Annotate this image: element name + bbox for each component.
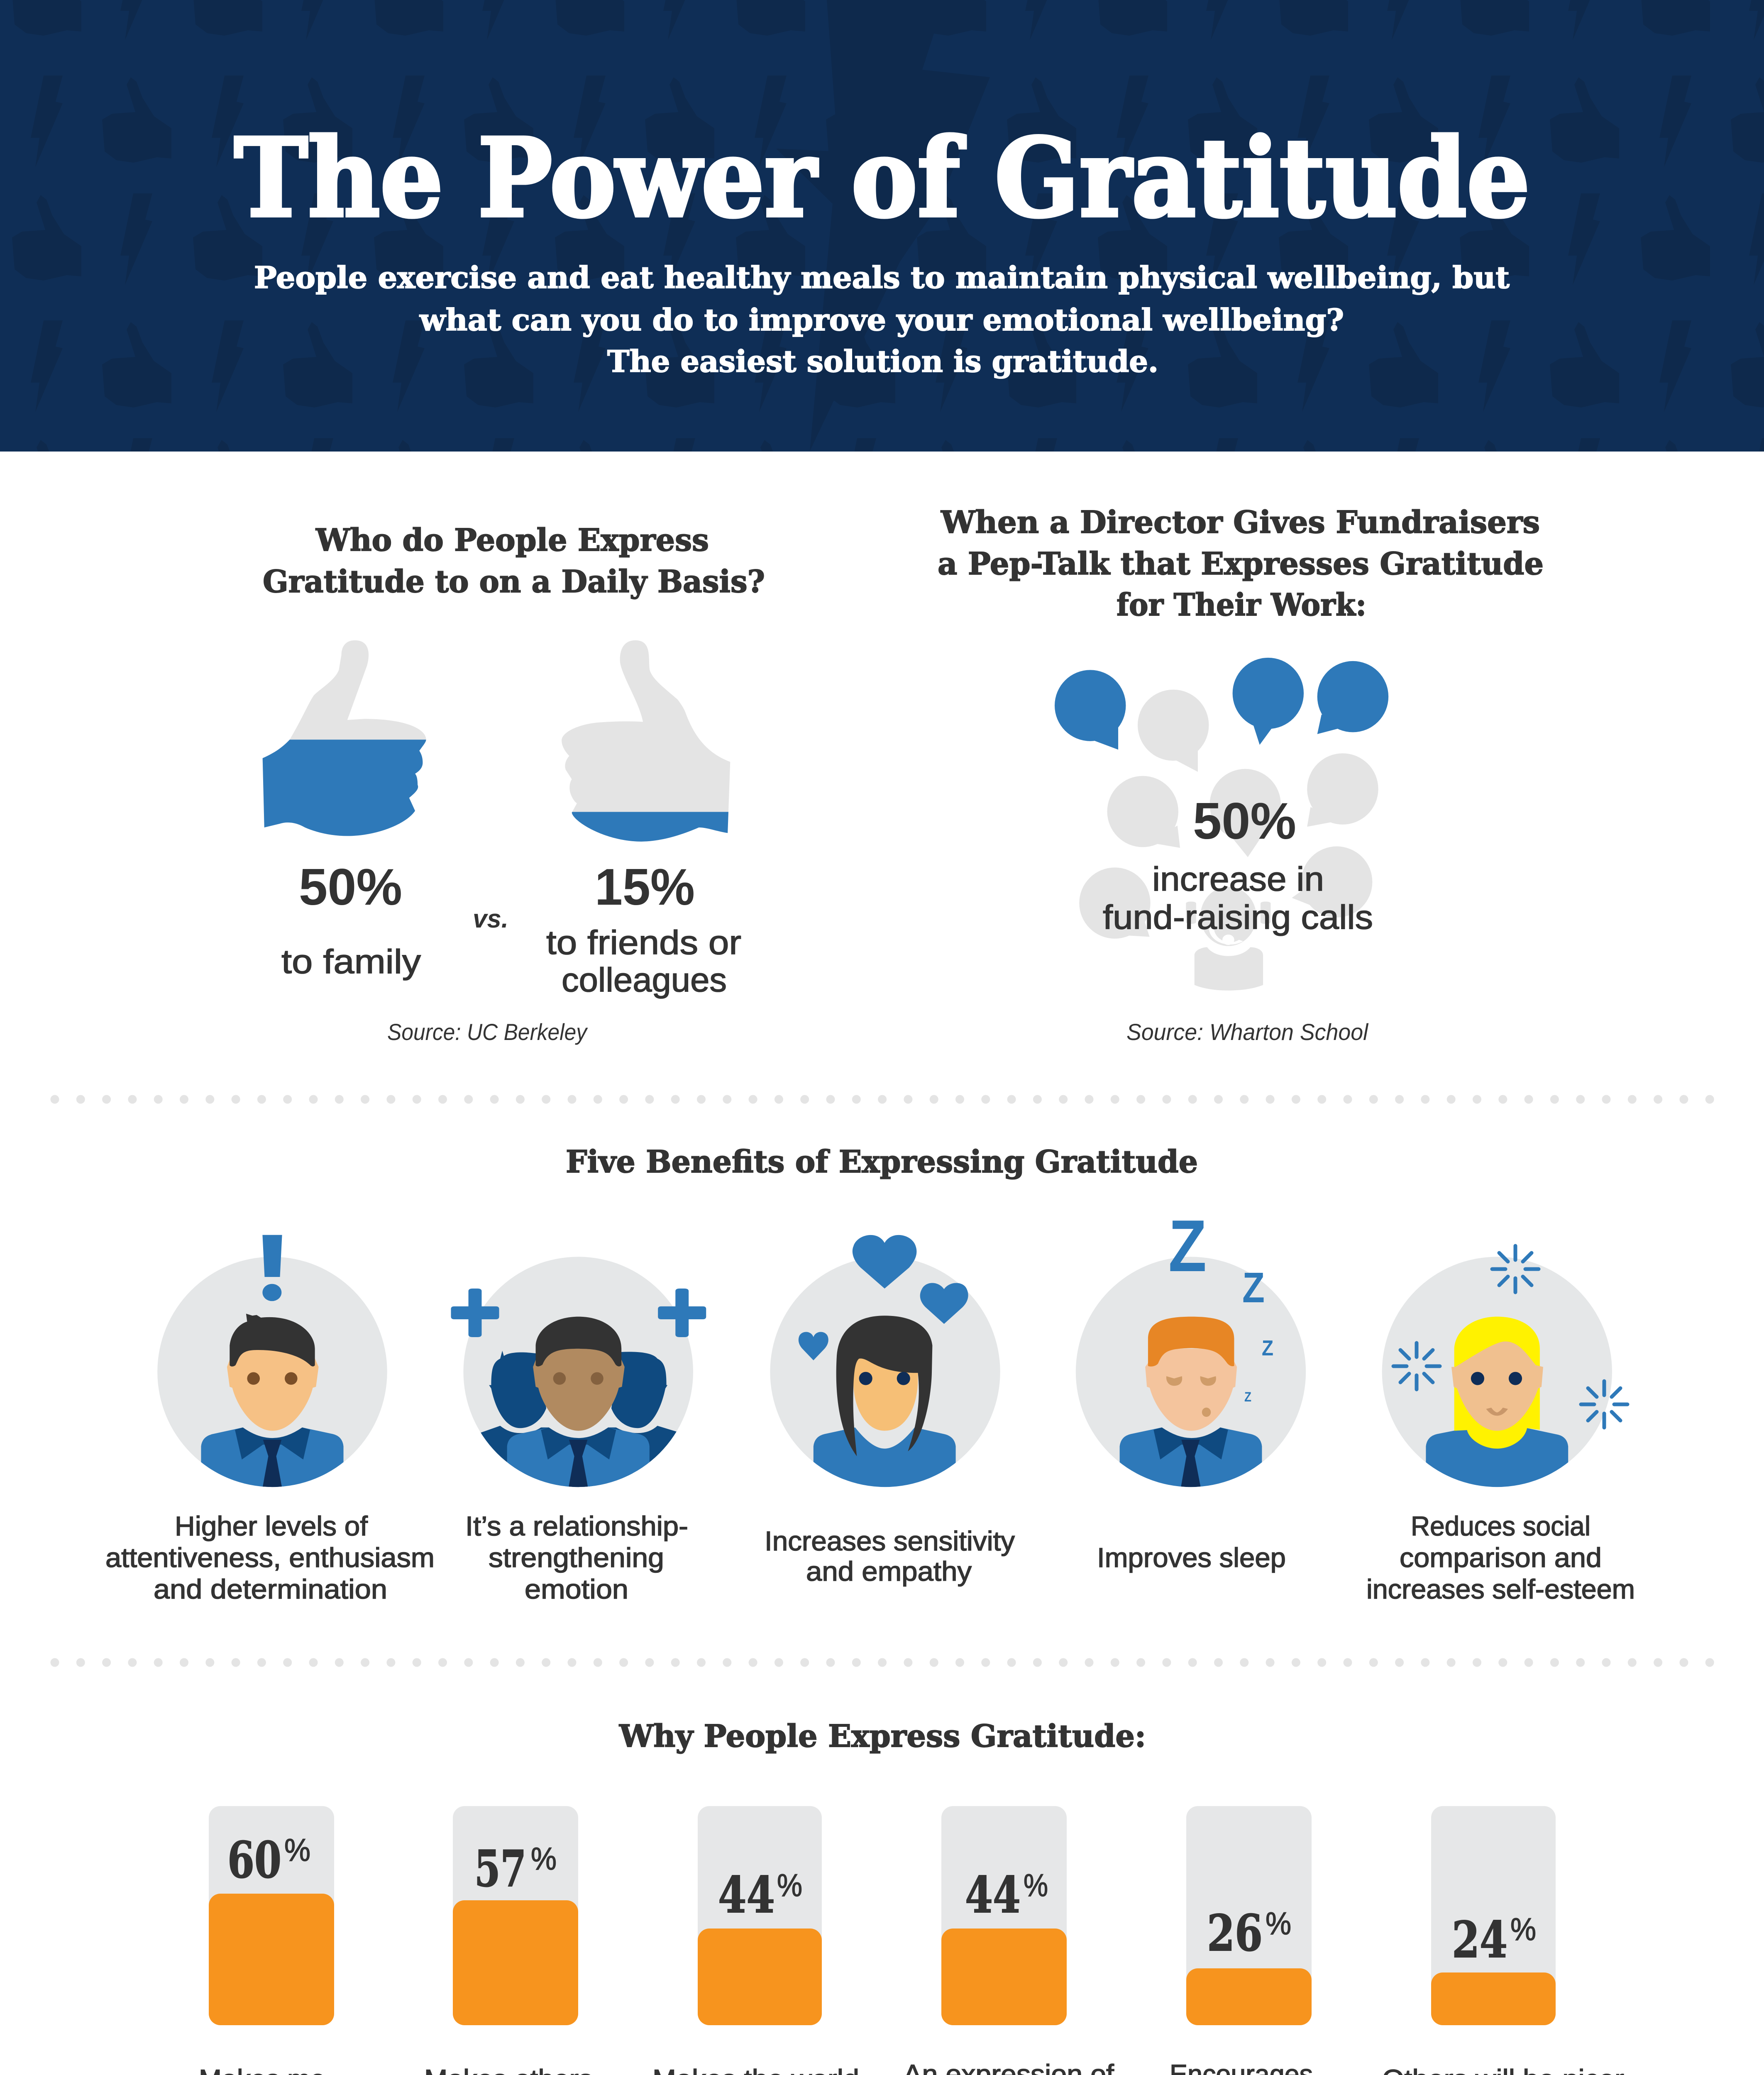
icon: thumbs up left 50 percent — [263, 640, 426, 836]
stat: 15 percent to friends or colleagues: colleagues — [562, 961, 727, 999]
stat: 15 percent to friends or colleagues: 15% — [595, 859, 695, 916]
source: Wharton School: Source: Wharton School — [1126, 1019, 1368, 1045]
icon: speech bubbles and headset person — [1055, 658, 1388, 991]
benefit 1 icon: attentive man — [157, 1235, 387, 1491]
header intro text: People exercise and eat healthy meals to maintain physical wellbeing, but — [254, 260, 1510, 295]
benefit 5 label: comparison and — [1400, 1542, 1602, 1573]
icon: thumbs up right 15 percent — [562, 640, 730, 842]
bar: 44 percent love: 44 — [965, 1866, 1021, 1924]
stat: 50 percent to family: 50% — [299, 859, 402, 916]
stat: 50 percent to family: to family — [281, 943, 421, 981]
bar: 44 percent love — [903, 1806, 1114, 2075]
benefit 5 label: Reduces social — [1411, 1511, 1591, 1541]
header intro text — [254, 260, 1510, 379]
vs label: vs. — [473, 905, 508, 933]
bar: 24 percent — [1382, 1806, 1624, 2075]
benefit 4 icon: sleeping man: Z — [1168, 1205, 1207, 1287]
benefit 2 label — [465, 1511, 688, 1604]
benefit 5 label — [1366, 1511, 1635, 1604]
bar: 26 percent: 26 — [1207, 1904, 1263, 1963]
benefit 2 label: It’s a relationship- — [465, 1511, 688, 1541]
bar: 24 percent: % — [1510, 1912, 1536, 1947]
heading: director pep-talk: a Pep-Talk that Expresses Gratitude — [938, 546, 1544, 582]
benefit 3 label: Increases sensitivity — [765, 1526, 1015, 1556]
benefit 2 icon: man with colleagues — [451, 1257, 706, 1491]
benefit 5 label: increases self-esteem — [1366, 1574, 1635, 1604]
heading: director pep-talk: for Their Work: — [1117, 587, 1366, 623]
benefit 1 label: attentiveness, enthusiasm — [105, 1542, 435, 1573]
stat: 50 percent increase in fund-raising calls: 50% — [1193, 793, 1296, 850]
benefit 1 label: Higher levels of — [175, 1511, 368, 1541]
heading: director pep-talk — [938, 505, 1544, 623]
header banner — [0, 0, 1764, 452]
bar: 60 percent: 60 — [227, 1831, 281, 1889]
stat: 15 percent to friends or colleagues — [546, 859, 741, 999]
stat: 50 percent to family — [281, 859, 421, 981]
bar: 24 percent: 24 — [1452, 1911, 1507, 1969]
stat: 50 percent increase in fund-raising calls: fund-raising calls — [1103, 898, 1373, 936]
bar: 57 percent — [424, 1806, 593, 2075]
bar: 60 percent — [199, 1806, 334, 2075]
benefit 2 label: strengthening — [489, 1542, 664, 1573]
stat: 50 percent increase in fund-raising calls — [1103, 793, 1373, 936]
heading: who do people express gratitude to: Gratitude to on a Daily Basis? — [263, 564, 765, 600]
benefit 3 label: and empathy — [806, 1556, 972, 1587]
heading: who do people express gratitude to: Who do People Express — [315, 522, 709, 558]
benefit 5 icon: blonde woman with sparkles — [1382, 1246, 1627, 1491]
bar: 60 percent: % — [284, 1833, 310, 1868]
stat: 50 percent increase in fund-raising calls: increase in — [1152, 860, 1324, 898]
bar: 44 percent world: % — [777, 1868, 802, 1903]
benefit 3 icon: woman with hearts — [770, 1235, 1000, 1491]
bar: 57 percent: % — [531, 1841, 557, 1877]
bar: 44 percent world — [652, 1806, 859, 2075]
heading: five benefits: Five Benefits of Expressing Gratitude — [566, 1144, 1198, 1180]
benefit 1 label — [105, 1511, 435, 1604]
benefit 1 label: and determination — [154, 1574, 387, 1604]
benefit 4 icon: sleeping man: Z — [1244, 1389, 1251, 1404]
benefit 4 label: Improves sleep — [1097, 1542, 1286, 1573]
bar chart: reasons — [199, 1806, 1624, 2075]
header intro text: The easiest solution is gratitude. — [607, 344, 1158, 379]
bar: 26 percent — [1143, 1806, 1339, 2075]
benefit 4 icon: sleeping man — [1076, 1205, 1306, 1491]
heading: why people express gratitude: Why People Express Gratitude: — [619, 1719, 1146, 1754]
stat: 15 percent to friends or colleagues: to friends or — [546, 924, 741, 962]
bar: 44 percent world: 44 — [718, 1866, 775, 1924]
heading: director pep-talk: When a Director Gives Fundraisers — [941, 505, 1540, 540]
benefit 4 icon: sleeping man: Z — [1262, 1336, 1273, 1360]
source: UC Berkeley: Source: UC Berkeley — [387, 1019, 588, 1045]
benefit 3 label — [765, 1526, 1015, 1587]
heading: who do people express gratitude to — [263, 522, 765, 600]
benefit 2 label: emotion — [525, 1574, 628, 1604]
bar: 26 percent: % — [1266, 1906, 1291, 1941]
bar: 57 percent: 57 — [474, 1840, 526, 1898]
header intro text: what can you do to improve your emotional wellbeing? — [419, 302, 1344, 337]
title: The Power of Gratitude — [234, 115, 1530, 242]
bar: 44 percent love: % — [1024, 1868, 1048, 1903]
benefit 4 icon: sleeping man: Z — [1242, 1264, 1265, 1311]
